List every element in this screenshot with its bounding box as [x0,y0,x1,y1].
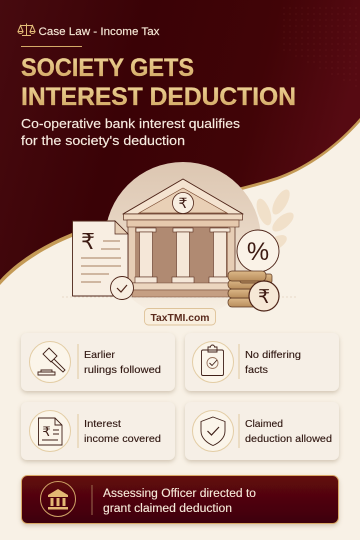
backdrop circle [105,162,261,318]
percent badge [237,230,279,272]
pediment rupee badge: ₹ [179,196,188,212]
maroon header wave [0,0,360,285]
check badge [110,276,134,300]
icon: rupee document [38,418,62,445]
icon: bank [48,489,68,510]
card: claimed deduction: Claimed [245,418,283,430]
brand pill: TaxTMI.com [150,312,210,324]
card: no differing facts: facts [245,364,268,376]
title [21,54,296,111]
card: claimed deduction [185,402,339,460]
banner: officer direction: grant claimed deduction [103,503,232,515]
title: INTEREST DEDUCTION [21,83,296,111]
plinth [132,283,233,290]
icon: scales of justice [18,24,35,36]
card: no differing facts: No differing [245,349,301,361]
icon: gavel [38,348,65,375]
pediment [123,179,243,214]
document with rupee [72,221,128,296]
card: no differing facts [185,333,339,391]
coin stack [228,271,272,307]
pediment rupee badge [172,192,194,214]
bank body [128,226,235,283]
category label: Case Law - Income Tax [38,26,160,38]
banner: officer direction [22,476,338,524]
card: earlier rulings [21,333,175,391]
columns [135,228,231,283]
card: interest income: Interest [84,418,121,430]
card: earlier rulings: rulings followed [84,364,161,376]
subtitle: for the society's deduction [21,133,185,148]
illustration: bank with document and coins [62,162,298,318]
rupee coin [249,281,279,311]
title: SOCIETY GETS [21,54,194,82]
icon: rupee document: ₹ [42,425,51,440]
brand pill [144,308,216,325]
banner: officer direction: Assessing Officer directed to [103,488,256,500]
document with rupee: ₹ [81,230,95,255]
card: interest income [21,402,175,460]
icon: shield check [201,417,225,446]
card: interest income: income covered [84,433,161,445]
icon: clipboard [202,345,224,376]
icon: wheat leaves [254,187,297,254]
card: earlier rulings: Earlier [84,349,116,361]
entablature [124,214,242,220]
horizon line [62,296,298,298]
subtitle: Co-operative bank interest qualifies [21,116,241,131]
rupee coin: ₹ [258,286,270,308]
subtitle [21,116,241,148]
percent badge: % [247,238,269,266]
card: claimed deduction: deduction allowed [245,433,332,445]
